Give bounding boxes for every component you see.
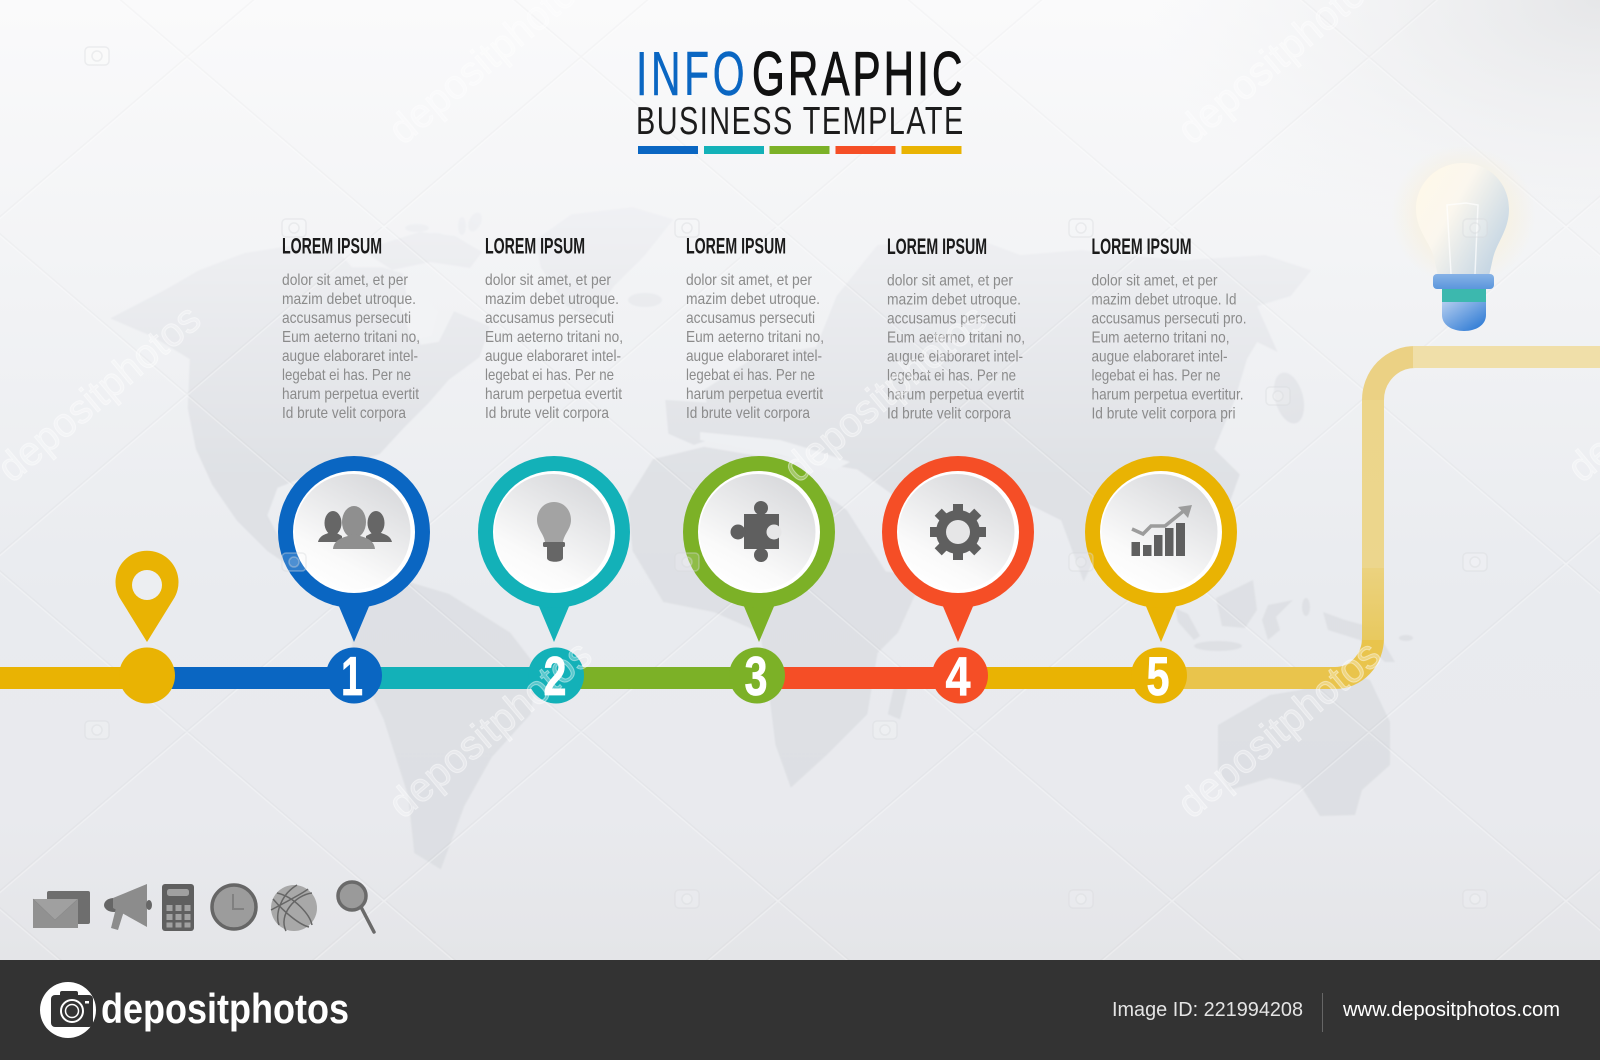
- icon: magnifier: [338, 882, 374, 932]
- text block 2: legebat ei has. Per ne: [485, 367, 614, 384]
- footer url: www.depositphotos.com: [1342, 999, 1560, 1021]
- step 1 marker: 1: [341, 645, 363, 707]
- text block 2: Eum aeterno tritani no,: [485, 329, 623, 346]
- text block 3: mazim debet utroque.: [686, 291, 820, 308]
- light bulb: [1391, 145, 1535, 331]
- text block 2: [485, 234, 623, 422]
- icon: envelope: [33, 891, 90, 928]
- watermark: depositphotos: [0, 0, 1600, 827]
- icon: clock: [212, 885, 256, 929]
- title colour bars: [638, 146, 962, 154]
- world map: [110, 207, 1413, 869]
- start location pin: [116, 551, 178, 704]
- icon: gear: [930, 504, 986, 560]
- text block 4: LOREM IPSUM: [887, 234, 987, 259]
- text block 3: accusamus persecuti: [686, 310, 815, 327]
- text block 5: harum perpetua evertitur.: [1092, 386, 1244, 404]
- text block 3: Id brute velit corpora: [686, 405, 810, 422]
- text block 3: LOREM IPSUM: [686, 234, 786, 258]
- step 3 marker: 3: [744, 645, 768, 707]
- icon: light bulb: [537, 502, 571, 562]
- text block 5: LOREM IPSUM: [1092, 234, 1192, 259]
- text block 3: harum perpetua evertit: [686, 386, 823, 403]
- text block 2: augue elaboraret intel-: [485, 348, 621, 365]
- title: BUSINESS TEMPLATE: [636, 100, 965, 143]
- footer image id: Image ID: 221994208: [1112, 999, 1303, 1021]
- text block 4: mazim debet utroque.: [887, 292, 1021, 308]
- step 5 marker: [1085, 456, 1237, 707]
- footer logo: [40, 982, 349, 1038]
- icon: megaphone: [104, 884, 152, 930]
- icon: puzzle piece: [730, 501, 782, 562]
- step 2 marker: 2: [544, 645, 566, 707]
- text block 1: accusamus persecuti: [282, 310, 411, 327]
- text block 5: augue elaboraret intel-: [1092, 348, 1228, 366]
- text block 3: augue elaboraret intel-: [686, 348, 822, 365]
- footer bar: [0, 960, 1600, 1060]
- text block 3: legebat ei has. Per ne: [686, 367, 815, 384]
- text block 5: legebat ei has. Per ne: [1092, 368, 1221, 384]
- text block 3: [686, 234, 824, 422]
- text block 5: [1092, 234, 1246, 422]
- text block 1: dolor sit amet, et per: [282, 272, 409, 289]
- text block 1: mazim debet utroque.: [282, 291, 416, 308]
- text block 2: dolor sit amet, et per: [485, 272, 612, 289]
- step 5 marker: 5: [1146, 645, 1170, 707]
- text block 5: mazim debet utroque. Id: [1092, 292, 1236, 308]
- text block 1: [282, 234, 420, 422]
- text block 1: LOREM IPSUM: [282, 234, 382, 258]
- step 4 marker: [882, 456, 1034, 707]
- icon row: [33, 882, 374, 932]
- watermark: camera icons: [85, 47, 1487, 908]
- step 4 marker: 4: [946, 645, 971, 707]
- icon: globe: [271, 885, 317, 931]
- text block 4: dolor sit amet, et per: [887, 272, 1014, 290]
- text block 1: harum perpetua evertit: [282, 386, 419, 403]
- text block 4: harum perpetua evertit: [887, 386, 1024, 404]
- title: [636, 40, 965, 143]
- text block 4: Id brute velit corpora: [887, 406, 1011, 422]
- text block 2: LOREM IPSUM: [485, 234, 585, 258]
- text block 2: mazim debet utroque.: [485, 291, 619, 308]
- text block 2: harum perpetua evertit: [485, 386, 622, 403]
- text block 3: dolor sit amet, et per: [686, 272, 813, 289]
- text block 5: accusamus persecuti pro.: [1092, 310, 1246, 328]
- text block 4: [887, 234, 1025, 422]
- title: GRAPHIC: [752, 40, 965, 109]
- text block 1: augue elaboraret intel-: [282, 348, 418, 365]
- watermark: depositphotos: depositphotos: [1168, 631, 1389, 827]
- text block 5: Eum aeterno tritani no,: [1092, 330, 1230, 346]
- text block 5: dolor sit amet, et per: [1092, 272, 1218, 290]
- footer logo: depositphotos: [101, 985, 349, 1032]
- step 3 marker: [683, 456, 835, 707]
- icon: people: [318, 506, 392, 549]
- title: INFO: [636, 40, 748, 109]
- text block 1: Id brute velit corpora: [282, 405, 406, 422]
- text block 4: legebat ei has. Per ne: [887, 368, 1016, 384]
- icon: calculator: [162, 884, 194, 931]
- watermark: depositphotos: depositphotos: [379, 631, 600, 827]
- step 1 marker: [278, 456, 430, 707]
- text block 5: Id brute velit corpora pri: [1092, 406, 1236, 422]
- step 2 marker: [478, 456, 630, 707]
- text block 1: legebat ei has. Per ne: [282, 367, 411, 384]
- icon: growth chart: [1132, 505, 1192, 556]
- text block 4: Eum aeterno tritani no,: [887, 330, 1025, 346]
- watermark: depositphotos: depositphotos: [774, 295, 995, 491]
- text block 1: Eum aeterno tritani no,: [282, 329, 420, 346]
- text block 4: augue elaboraret intel-: [887, 348, 1023, 366]
- footer divider: [1322, 993, 1323, 1032]
- text block 4: accusamus persecuti: [887, 310, 1016, 328]
- text block 2: accusamus persecuti: [485, 310, 614, 327]
- text block 2: Id brute velit corpora: [485, 405, 609, 422]
- text block 3: Eum aeterno tritani no,: [686, 329, 824, 346]
- timeline path: [0, 357, 1600, 678]
